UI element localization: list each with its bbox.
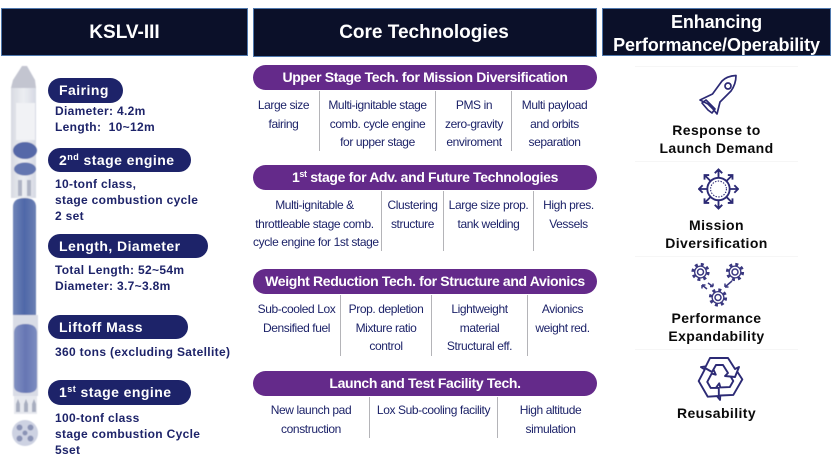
item: upper stage engine — [328, 98, 427, 149]
label: Length, Diameter: Length, Diameter — [59, 238, 181, 254]
panel: 1st stage engine — [48, 380, 200, 457]
item: tank welding — [449, 198, 528, 231]
item: PMS — [445, 98, 504, 149]
label: 2nd stage engine: 2nd stage engine — [59, 152, 174, 168]
panel: Fairing — [48, 78, 155, 134]
item: multi payload: separation — [528, 135, 581, 149]
item: throttleable engine — [253, 198, 379, 249]
item: upper stage engine: Multi-ignitable stage — [328, 98, 427, 112]
specs: 2nd stage engine: 10-tonf class, — [55, 177, 136, 191]
item: altitude simulation: simulation — [525, 422, 576, 436]
item: upper stage engine: comb. cycle engine — [330, 117, 425, 131]
label: mission diversification: Diversification — [665, 235, 768, 251]
item: PMS: PMS in — [456, 98, 492, 112]
header: Enhancing Performance/Operability: Performance/Operability — [613, 35, 820, 55]
heading: first stage — [253, 165, 597, 190]
heading: upper stage: Upper Stage Tech. for Mission Diversification — [282, 69, 568, 85]
panel: 2nd stage engine — [48, 148, 198, 223]
icon: rocket — [699, 74, 737, 115]
header: Core Technologies: Core Technologies — [339, 22, 509, 43]
item: lightweight material — [447, 302, 512, 353]
label: response to launch demand: Response to — [672, 122, 761, 138]
item: launch pad — [271, 403, 351, 436]
item: clustering: structure — [391, 217, 434, 231]
heading: launch facility: Launch and Test Facility Tech. — [329, 375, 521, 391]
specs: 1st stage engine: 100-tonf class — [55, 411, 140, 425]
item: mixture ratio: Mixture ratio — [356, 321, 416, 335]
item: upper stage engine: for upper stage — [340, 135, 415, 149]
label: 1st stage engine: 1st stage engine — [59, 384, 171, 400]
item: tank welding: Large size prop. — [449, 198, 528, 212]
label: Fairing: Fairing — [59, 82, 109, 98]
label: 1st stage engine — [48, 380, 191, 405]
item: PMS: zero-gravity — [445, 117, 503, 131]
label: Fairing — [48, 78, 123, 103]
item: multi payload: and orbits — [530, 117, 579, 131]
item: lightweight material: Lightweight — [451, 302, 508, 316]
item: densified fuel: Densified fuel — [263, 321, 330, 335]
specs: 2nd stage engine — [55, 177, 198, 223]
item: tank welding: tank welding — [458, 217, 519, 231]
label: performance expandability — [668, 310, 765, 344]
header: KSLV-III: KSLV-III — [89, 22, 160, 43]
illustration: KSLV-III rocket — [10, 66, 38, 446]
header: KSLV-III — [1, 8, 248, 56]
item: pressure vessels: High pres. — [543, 198, 594, 212]
specs: Fairing: Length: 10~12m — [55, 120, 155, 134]
item: large size fairing — [258, 98, 309, 131]
item: avionics — [535, 302, 590, 335]
item: lightweight material: material — [460, 321, 499, 335]
item: avionics: Avionics — [542, 302, 583, 316]
heading: upper stage — [253, 65, 597, 90]
item: mixture ratio: control — [369, 339, 403, 353]
label: response to launch demand — [659, 122, 774, 156]
label: mission diversification: Mission — [689, 217, 744, 233]
item: clustering: Clustering — [387, 198, 438, 212]
specs: Length, Diameter: Total Length: 52~54m — [55, 263, 184, 277]
item: pressure vessels: Vessels — [549, 217, 588, 231]
specs: 2nd stage engine: 2 set — [55, 209, 84, 223]
specs: 1st stage engine — [55, 411, 200, 457]
item: throttleable engine: cycle engine for 1st stage — [253, 235, 379, 249]
item: lightweight material: Structural eff. — [447, 339, 512, 353]
panel: upper stage technologies — [253, 65, 597, 151]
icon: gears — [691, 262, 744, 307]
label: performance expandability: Performance — [672, 310, 762, 326]
specs: Fairing: Diameter: 4.2m — [55, 104, 146, 118]
item: clustering — [387, 198, 438, 231]
item: mixture ratio — [349, 302, 424, 353]
panel: Liftoff Mass — [48, 315, 230, 359]
label: response to launch demand: Launch Demand — [659, 140, 774, 156]
specs: Liftoff Mass: 360 tons (excluding Satellite) — [55, 345, 230, 359]
header: Enhancing Performance/Operability — [602, 8, 831, 56]
panel: Length, Diameter — [48, 234, 208, 293]
label: mission diversification — [665, 217, 768, 251]
heading: weight reduction: Weight Reduction Tech. for Structure and Avionics — [265, 273, 585, 289]
panel: launch and test facility — [253, 371, 597, 438]
item: altitude simulation — [520, 403, 582, 436]
item: lox sub-cooling: Lox Sub-cooling facility — [377, 403, 490, 417]
label: Liftoff Mass: Liftoff Mass — [59, 319, 143, 335]
icon: mission diversification — [698, 168, 739, 210]
item: throttleable engine: throttleable stage comb. — [255, 217, 374, 231]
specs: 2nd stage engine: stage combustion cycle — [55, 193, 198, 207]
panel: first stage technologies — [253, 165, 597, 251]
label: Length, Diameter — [48, 234, 208, 258]
label: reusability: Reusability — [677, 405, 756, 421]
header: Core Technologies — [253, 8, 597, 57]
item: launch pad: New launch pad — [271, 403, 351, 417]
item: PMS: enviroment — [446, 135, 502, 149]
item: avionics: weight red. — [535, 321, 590, 335]
icon: recycling — [698, 357, 744, 401]
specs: Fairing — [55, 104, 155, 134]
item: densified fuel — [258, 302, 336, 335]
specs: Length, Diameter — [55, 263, 184, 293]
label: Liftoff Mass — [48, 315, 188, 339]
specs: Length, Diameter: Diameter: 3.7~3.8m — [55, 279, 171, 293]
item: mixture ratio: Prop. depletion — [349, 302, 423, 316]
header: Enhancing Performance/Operability: Enhancing — [671, 12, 762, 32]
item: large size fairing: fairing — [269, 117, 298, 131]
specs: 1st stage engine: 5set — [55, 443, 80, 457]
item: multi payload — [522, 98, 587, 149]
heading: launch facility — [253, 371, 597, 396]
panel: weight reduction technologies — [253, 269, 597, 356]
item: altitude simulation: High altitude — [520, 403, 581, 417]
label: performance expandability: Expandability — [668, 328, 765, 344]
specs: 1st stage engine: stage combustion Cycle — [55, 427, 200, 441]
item: pressure vessels — [543, 198, 594, 231]
item: launch pad: construction — [281, 422, 341, 436]
heading: weight reduction — [253, 269, 597, 294]
item: multi payload: Multi payload — [522, 98, 587, 112]
label: 2nd stage engine — [48, 148, 191, 172]
item: throttleable engine: Multi-ignitable & — [275, 198, 354, 212]
heading: first stage: 1st stage for Adv. and Future Technologies — [292, 169, 558, 185]
item: densified fuel: Sub-cooled Lox — [258, 302, 335, 316]
item: large size fairing: Large size — [258, 98, 309, 112]
